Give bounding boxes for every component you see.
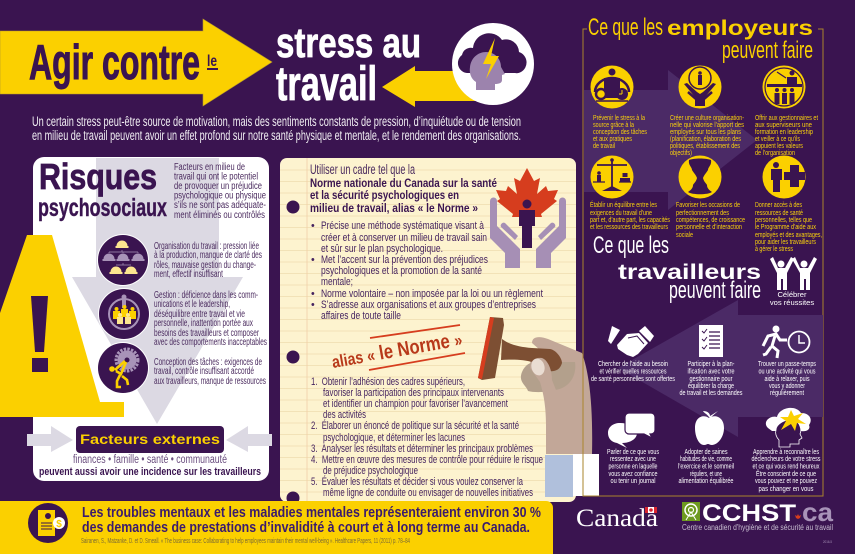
logo: Canada wordmark: Canada [576, 505, 658, 532]
title: stress au travail: travail [276, 58, 377, 111]
text: conception des taches: travail, contrôle insuffisant accordé [154, 366, 254, 377]
text: organisation du travail: ment, effectif insuffisant [154, 269, 223, 280]
text: employer action 3: et veiller à ce qu’ils [755, 134, 800, 143]
heading: workers: Ce que les [593, 232, 669, 259]
framework bullet list: • [311, 299, 315, 311]
text: find a hobby: vous y adonner [769, 381, 805, 390]
text: organisation du travail: à la production, manque de clarté des [154, 250, 262, 261]
text: gestion: avec des comportements inacceptables [154, 337, 267, 348]
text: recognise triggers: et ce qui vous rend heureux [752, 462, 820, 470]
title banner: Agir contre le: le [207, 53, 217, 70]
text: healthy habits: l’exercice et le sommeil [678, 462, 734, 470]
illustration: hand holding stamp [478, 317, 599, 497]
notebook heading: Utiliser un cadre tel que la [310, 162, 415, 177]
text: employer action 4 [590, 200, 670, 231]
definition text: travail qui ont le potentiel [174, 172, 258, 182]
text: employer action 3: aux superviseurs une [755, 120, 812, 129]
text: employer action 2: Créer une culture organisation- [670, 113, 744, 122]
logo: CCHST.ca: ca [802, 497, 834, 527]
heading: employers: employeurs [667, 17, 813, 40]
icon: apple [695, 411, 724, 445]
text: external factors list: finances • famille • santé • communauté [73, 454, 227, 466]
framework bullet list: et sûr sur le plan psychologique. [321, 243, 443, 255]
arrow pointing to title [382, 66, 490, 107]
icon: head with cloud and sun [766, 408, 811, 447]
text: find a hobby: régulièrement [770, 388, 805, 397]
framework bullet list: • [311, 254, 315, 266]
grey background arrow [72, 158, 243, 424]
heading: employers: Ce que les [588, 14, 663, 41]
text: gestion: déséquilibre entre travail et vie [154, 309, 245, 320]
framework bullet list: psychologiques et la promotion de la santé [321, 265, 482, 277]
text: organisation du travail [154, 241, 262, 280]
text: employer action 1: Prévenir le stress à la [593, 113, 646, 122]
text: gestion: unications et le leadership, [154, 299, 230, 310]
icon: stressed head under storm cloud [452, 23, 534, 105]
implementation numbered list: 5. Évaluer les résultats et décider si vous voulez conserver la [311, 475, 523, 488]
text: recognise triggers: Apprendre à reconnaître les [753, 447, 819, 456]
text: talk to someone: Parler de ce que vous [607, 447, 659, 456]
icon: worker carrying gear [97, 342, 149, 394]
text: conception des taches: Conception des tâches : exigences de [154, 357, 262, 368]
logo: CCHST.ca: CCHST [702, 500, 796, 527]
implementation numbered list: 1. Obtenir l’adhésion des cadres supérieurs, [311, 376, 465, 388]
text: healthy habits: habitudes de vie, comme [680, 454, 732, 463]
text: seek help: de santé personnelles sont offertes [591, 374, 675, 383]
text: employer action 1 [593, 113, 647, 150]
panel: what workers can do [591, 232, 823, 493]
implementation numbered list: psychologique, et déterminer les lacunes [323, 432, 465, 444]
text: gestion: besoins des travailleurs et composer [154, 328, 259, 339]
notebook heading: milieu de travail, alias « le Norme » [310, 201, 478, 215]
title banner: Agir contre le [0, 19, 272, 106]
heading: workers: travailleurs [618, 261, 761, 284]
text: employer action 2 [670, 113, 744, 157]
definition text: ment éliminés ou contrôlés [174, 210, 265, 221]
text: participate in planning: ification avec votre [688, 366, 734, 376]
text: seek help [591, 359, 675, 383]
text: employer action 6: pour aider les travailleurs [755, 237, 816, 246]
text: healthy habits: alimentation équilibrée [678, 476, 734, 485]
text: external factors list: peuvent aussi avoir une incidence sur les travailleurs [39, 466, 261, 478]
text: seek help: Chercher de l’aide au besoin [598, 359, 668, 368]
box: Facteurs externes: Facteurs externes [80, 431, 220, 447]
text: find a hobby: ou une activité qui vous [758, 366, 816, 376]
icon: prevent stress at source [590, 66, 634, 108]
text: gestion [154, 290, 267, 348]
text: employer action 6: ressources de santé [755, 208, 803, 217]
implementation numbered list [311, 376, 543, 499]
text: employer action 6: le Programme d’aide aux [755, 222, 816, 231]
icon: person and health cross [762, 156, 806, 198]
text: employer action 2: objectifs) [670, 148, 692, 157]
icon: disability claim form: $ [56, 519, 62, 530]
text: employer action 6: employés et des avantages, [755, 230, 822, 239]
text: participate in planning: gestionnaire pour [690, 374, 733, 383]
text: participate in planning: de travail et les demandes [680, 388, 743, 397]
text: recognise triggers: pas changer en vous [758, 484, 814, 493]
text: employer action 4: exigences du travail d’une [590, 208, 652, 217]
text: talk to someone [607, 447, 659, 485]
icon: checklist [699, 325, 723, 357]
text: employer action 3 [755, 113, 819, 157]
title: stress au travail [276, 19, 421, 111]
text: employer action 5: perfectionnement des [676, 208, 729, 217]
framework bullet list: • [311, 220, 315, 232]
frame and background arrow [583, 29, 823, 496]
definition text [174, 162, 266, 221]
heading: workers [593, 232, 761, 304]
text: employer action 5: personnelle et d’interaction [676, 222, 742, 231]
icon: vase faces [678, 156, 722, 198]
title banner: Agir contre le: Agir contre [29, 36, 200, 90]
text: employer action 3: appuient les valeurs [755, 141, 803, 150]
title: stress au travail: stress au [276, 19, 421, 66]
statistic text: des demandes de prestations d’invalidité à court et à long terme au Canada. [82, 520, 530, 536]
panel: what employers can do [583, 14, 823, 496]
bottom band: statistic [0, 501, 553, 554]
text: employer action 6: personnelles, telles que [755, 215, 812, 224]
definition text: Facteurs en milieu de [174, 162, 245, 173]
text: employer action 6: Donner accès à des [755, 200, 802, 209]
text: seek help: et vérifier quelles ressources [600, 366, 667, 376]
text: conception des taches [154, 357, 266, 387]
implementation numbered list: 3. Analyser les résultats et déterminer les principaux problèmes [311, 443, 533, 455]
text: celebrate: Célébrer [777, 290, 807, 299]
implementation numbered list: favoriser la participation des principaux intervenants [323, 387, 504, 399]
icon: leadership training [762, 66, 806, 108]
definition text: de provoquer un préjudice [174, 181, 262, 192]
icon: work organisation hard hats [97, 234, 149, 286]
framework bullet list: • [311, 288, 315, 300]
text: employer action 1: conception des tâches [593, 127, 647, 136]
text: find a hobby: Trouver un passe-temps [758, 359, 816, 368]
text: employer action 2: employés sur tous les plans [670, 127, 741, 136]
intro text: en milieu de travail peuvent avoir un effet profond sur notre santé physique et mentale, et le rendement des organisations. [32, 128, 521, 143]
text: employer action 6: à gérer le stress [755, 244, 793, 253]
text: talk to someone: vous avez confiance [608, 469, 658, 478]
heading: Risques psychosociaux [38, 156, 167, 222]
notebook heading: et la sécurité psychologiques en [310, 188, 459, 202]
logo: CCHST.ca [682, 497, 834, 532]
definition text: psychologique ou physique [174, 190, 266, 202]
text: find a hobby: aide à relaxer, puis [764, 374, 810, 383]
icon: handshake [608, 326, 654, 357]
intro text: Un certain stress peut-être source de motivation, mais des sentiments constants de pression, d’inquiétude ou de tension [32, 114, 521, 129]
icon: balance scale [590, 156, 634, 198]
statistic text [81, 505, 541, 545]
text: employer action 3: formation en leadership [755, 127, 813, 136]
heading: workers: peuvent faire [669, 277, 761, 304]
heading: Risques psychosociaux: Risques [39, 156, 157, 197]
framework bullet list: créer et à conserver un milieu de travail sain [321, 232, 487, 244]
text: employer action 6 [755, 200, 822, 253]
framework bullet list [311, 220, 543, 322]
text: employer action 1: source grâce à la [593, 120, 635, 129]
text: participate in planning [680, 359, 743, 397]
icon: disability claim form [28, 503, 68, 543]
text: healthy habits: Adopter de saines [684, 447, 728, 456]
text: conception des taches: aux travailleurs, manque de ressources [154, 376, 266, 387]
intro text [32, 114, 521, 143]
text: employer action 5 [676, 200, 745, 239]
icon: hands holding person [678, 66, 722, 108]
implementation numbered list: et identifier un champion pour favoriser l’avancement [323, 398, 508, 410]
framework bullet list: affaires de toute taille [321, 310, 401, 322]
implementation numbered list: des activités [323, 409, 366, 421]
heading: employers [588, 14, 813, 64]
text: employer action 2: politiques, établissement des [670, 141, 740, 150]
implementation numbered list: même ligne de conduite ou envisager de nouvelles initiatives [323, 487, 533, 499]
implementation numbered list: de préjudice psychologique [323, 465, 418, 477]
implementation numbered list: 2. Élaborer un énoncé de politique sur la sécurité et la santé [311, 419, 519, 432]
heading: Risques psychosociaux: psychosociaux [38, 194, 167, 222]
arrows: external factors [27, 426, 272, 452]
text: find a hobby [758, 359, 816, 397]
text: recognise triggers: Être conscient de ce que [756, 469, 816, 478]
stamp: alias le Norme: alias « le Norme » [330, 328, 464, 373]
text: healthy habits: réguliers, et une [690, 469, 722, 478]
text: external factors list [39, 454, 261, 478]
text: recognise triggers: déclencheurs de votre stress [752, 454, 821, 463]
text: recognise triggers [752, 447, 821, 493]
warning triangle [0, 235, 124, 417]
text: employer action 5: Favoriser les occasions de [676, 200, 740, 209]
notebook heading: Norme nationale du Canada sur la santé [310, 176, 497, 190]
text: talk to someone: personne en laquelle [608, 462, 658, 470]
statistic text: Les troubles mentaux et les maladies mentales représenteraient environ 30 % [82, 505, 541, 521]
text: employer action 5: compétences, de croissance [676, 215, 745, 224]
icon: maple leaf, hands and worker [490, 168, 566, 268]
text: participate in planning: équilibrer la charge [688, 381, 734, 390]
panel: notebook [280, 158, 576, 504]
text: gestion: Gestion : déficience dans les comm- [154, 290, 258, 301]
text: celebrate: vos réussites [770, 298, 814, 307]
text: employer action 5: sociale [676, 230, 693, 239]
text: employer action 2: (planification, élaboration des [670, 134, 741, 143]
text: employer action 1: de travail [593, 141, 615, 150]
text: employer action 3: Offrir aux gestionnaires et [755, 113, 819, 122]
text: organisation du travail: rôles, mauvaise gestion du change- [154, 260, 256, 271]
text: celebrate [770, 290, 814, 307]
text: employer action 2: nelle qui valorise l’apport des [670, 120, 744, 129]
text: talk to someone: ressentez avec une [610, 454, 656, 463]
panel: risques psychosociaux [0, 156, 272, 481]
statistic text: Sairanen, S., Matzanke, D. et D. Smeall. « The business case: Collaborating to help employees maintain their mental well-being ». Healthcare Papers, 11 (2011) p. 78–84 [81, 536, 410, 545]
text: gestion: personnelle, inattention portée aux [154, 318, 253, 329]
icon: management [98, 288, 150, 340]
text: participate in planning: Participer à la plan- [688, 359, 735, 368]
framework bullet list: S’adresse aux organisations et aux groupes d’entreprises [321, 299, 536, 311]
text: employer action 4: et les ressources des travailleurs [590, 222, 668, 231]
framework bullet list: Précise une méthode systématique visant à [321, 220, 484, 232]
text: employer action 4: Établir un équilibre entre les [590, 200, 657, 209]
implementation numbered list: 4. Mettre en œuvre des mesures de contrôle pour réduire le risque [311, 454, 543, 466]
text: recognise triggers: vous pouvez et ne pouvez [755, 476, 817, 485]
icon: runner and clock [763, 326, 810, 358]
document number: 2016-5 [823, 539, 833, 544]
definition text: s’ils ne sont pas adéquate- [174, 200, 266, 211]
text: talk to someone: ou tenir un journal [610, 476, 656, 485]
text: healthy habits [678, 447, 734, 485]
framework bullet list: Norme volontaire – non imposée par la loi ou un règlement [321, 288, 543, 300]
text: employer action 3: de l’organisation [755, 148, 795, 157]
text: employer action 4: part et, d’autre part, les capacités [590, 215, 670, 224]
box: Facteurs externes [76, 426, 224, 453]
text: employer action 1: et aux pratiques [593, 134, 632, 143]
icon: people celebrating [770, 257, 817, 290]
icon: speech bubbles [608, 413, 655, 448]
notebook heading [310, 162, 497, 215]
background arrow [618, 300, 823, 437]
framework bullet list: Met l’accent sur la prévention des préjudices [321, 254, 488, 266]
text: organisation du travail: Organisation du travail : pression liée [154, 241, 259, 252]
framework bullet list: mentale; [321, 276, 353, 288]
